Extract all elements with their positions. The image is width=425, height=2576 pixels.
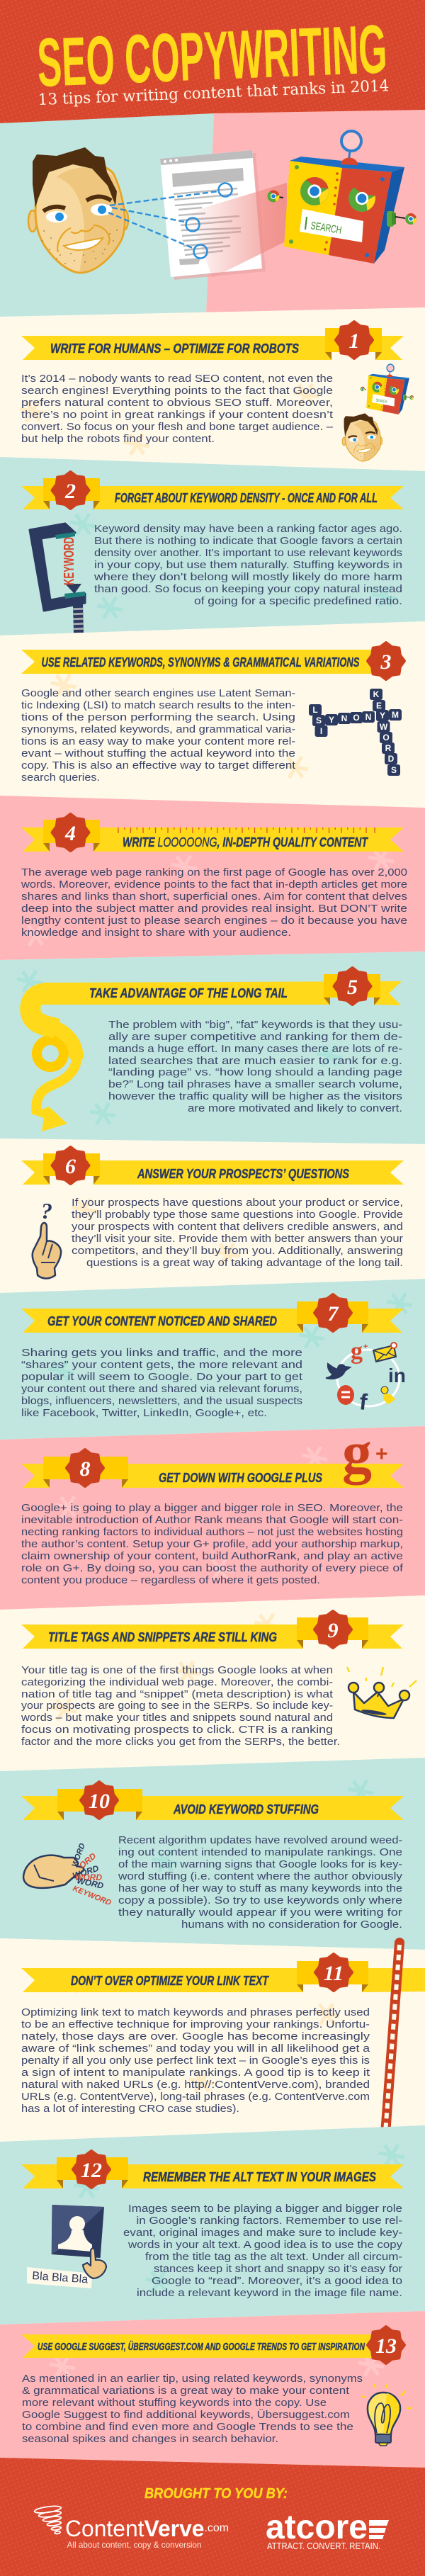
logo: ContentVerve: All about content, copy & conversion (67, 2540, 201, 2550)
icon: small face (342, 413, 382, 461)
text block 12: evant, original images and make sure to include key- (123, 2227, 402, 2239)
text block 13: more relevant without stuffing keywords into the copy. Use (22, 2397, 327, 2409)
icon: human face (28, 147, 128, 273)
text block 7: like Facebook, Twitter, LinkedIn, Google+, etc. (21, 1407, 267, 1419)
text block 4: words. Moreover, evidence points to the fact that in-depth articles get more (21, 879, 407, 891)
icon: google plus logo (342, 1420, 388, 1486)
icon: scrabble tiles: S (316, 716, 322, 725)
icon: scrabble tiles: I (320, 726, 322, 736)
icon: image card with alt text (27, 2205, 106, 2288)
panel: tip 6 (0, 1139, 425, 1293)
ribbon heading 4 with ruler: 4 (64, 822, 76, 845)
text block 6: they’ll visit your site. Provide them with better answers than your (72, 1233, 403, 1245)
text block 9: Your title tag is one of the first things Google looks at when (21, 1664, 333, 1676)
text block 2 (94, 523, 402, 607)
icon: social network ring: + (363, 1343, 368, 1351)
text block 10: copy a possible). So try to use keywords only where (118, 1894, 402, 1906)
icon: small robot (361, 364, 414, 414)
icon: small robot: SEARCH (375, 398, 387, 405)
icon: crown (347, 1667, 416, 1718)
icon: scrabble tiles: O (382, 733, 390, 742)
text block 11: URLs (e.g. ContentVerve), long-tail phrases (e.g. ContentVerve.com (21, 2091, 370, 2103)
text block 8: claim ownership of your content, build AuthorRank, and play an active (21, 1550, 403, 1562)
icon: social network ring (326, 1338, 406, 1415)
panel: tip 12 (0, 2125, 425, 2324)
text block 1: search engines! Everything points to the fact that Google (21, 385, 333, 397)
panel: tip 13 (0, 2311, 425, 2468)
ribbon heading 6: 6 (65, 1155, 76, 1178)
icon: scrabble tiles: N (366, 712, 371, 722)
icon: turkey stuffed with keywords: ORD (77, 1851, 98, 1870)
text block 8: Google+ is going to play a bigger and bigger role in SEO. Moreover, the (21, 1502, 403, 1514)
icon: scrabble tiles: R (385, 743, 392, 753)
icon: turkey stuffed with keywords: WORD (76, 1875, 105, 1891)
text block 12: Images seem to be playing a bigger and bigger role (128, 2203, 402, 2215)
text block 4: deep into the subject matter and provides real insight. But DON’T write (21, 903, 407, 915)
text block 4: lengthy content just to please search engines – do it because you have (21, 915, 407, 927)
text block 5: are more motivated and likely to convert. (188, 1102, 402, 1114)
text block 11: Optimizing link text to match keywords and phrases perfectly used (21, 2006, 370, 2018)
text block 12 (123, 2203, 403, 2299)
text block 11: natural with naked URLs (e.g. http//:ContentVerve.com), branded (21, 2079, 370, 2091)
text block 7 (21, 1347, 303, 1419)
icon: turkey stuffed with keywords: KEYWORD (72, 1885, 113, 1907)
ribbon heading 12: REMEMBER THE ALT TEXT IN YOUR IMAGES (143, 2170, 376, 2184)
text block 7: your content out there and shared via relevant forums, (21, 1383, 302, 1395)
text block 1 (21, 373, 334, 445)
text block 12: Google to “read”. Moreover, it’s a good idea to (152, 2275, 402, 2287)
icon: social network ring: g (351, 1338, 363, 1365)
icon: scrabble tiles: L (312, 705, 318, 715)
logo: ContentVerve: .com (205, 2522, 229, 2534)
text block 9: categorizing the individual web page. Moreover, the combi- (21, 1676, 333, 1688)
text block 6: competitors, and they’ll buy from you. Additionally, answering (72, 1245, 403, 1257)
text block 13: Google Suggest to find additional keywords, Übersuggest.com (22, 2408, 350, 2421)
icon: google plus logo: + (375, 1442, 388, 1466)
ribbon heading 9 (21, 1611, 404, 1649)
text block 7: Sharing gets you links and traffic, and the more (21, 1347, 302, 1359)
ribbon heading 3: 3 (380, 650, 391, 674)
ribbon heading 9: 9 (327, 1619, 339, 1642)
text block 10: word stuffing (i.e. content where the author obviously (118, 1870, 403, 1882)
icon: light bulb (361, 2384, 412, 2446)
icon: scrabble tiles: W (380, 722, 388, 732)
text block 13: As mentioned in an earlier tip, using related keywords, synonyms (22, 2373, 363, 2385)
ribbon heading 10: 10 (89, 1790, 110, 1813)
logo: ContentVerve (34, 2505, 229, 2550)
ribbon heading 7: GET YOUR CONTENT NOTICED AND SHARED (47, 1314, 277, 1328)
panel: tip 9 (0, 1595, 425, 1771)
text block 1: It’s 2014 – nobody wants to read SEO content, not even the (21, 373, 333, 385)
ribbon heading 5: 5 (347, 976, 358, 999)
panel: tip 1 (0, 307, 425, 471)
ribbon heading 7 (21, 1294, 404, 1333)
text block 9: nation of title tag and “snippet” (meta description) is what (21, 1688, 334, 1700)
ribbon heading 9: TITLE TAGS AND SNIPPETS ARE STILL KING (48, 1630, 277, 1644)
icon: hand with question mark: ? (41, 1198, 52, 1224)
text block 11: a sign of intent to manipulate rankings. A good tip is to keep it (21, 2067, 370, 2079)
text block 4: shares and links than short, superficial ones. Aim for content that delves (21, 891, 407, 903)
icon: clamp squeezing keyword (30, 524, 85, 633)
text block 5: ally are super competitive and ranking for them de- (108, 1031, 402, 1043)
ribbon heading 8: 8 (79, 1457, 91, 1481)
icon: scrabble tiles: D (388, 754, 395, 764)
subtitle: 13 tips for writing content that ranks in 2014 (38, 77, 390, 109)
ribbon heading 4 with ruler: WRITE LOOOOONG, IN-DEPTH QUALITY CONTENT (123, 835, 369, 849)
text block 8 (21, 1502, 404, 1586)
icon: chain (385, 1943, 400, 2134)
logo: atcore: ATTRACT. CONVERT. RETAIN. (267, 2541, 380, 2551)
ribbon heading 10 (21, 1782, 404, 1820)
panel: tip 7 (0, 1279, 425, 1440)
text block 1: prefers natural content to obvious SEO stuff. Moreover, (21, 397, 333, 409)
text block 1: convert. So focus on your flesh and bone target audience. – (21, 421, 334, 433)
icon: robot: SEARCH (310, 220, 342, 237)
ribbon heading 11 (21, 1954, 425, 1992)
text block 8: content you produce – regardless of where it gets posted. (21, 1574, 320, 1586)
text block 4: The average web page ranking on the first page of Google has over 2,000 (21, 866, 407, 879)
text block 6: they’ll probably type those same questions into Google. Provide (72, 1209, 403, 1221)
panel: tip 8 (0, 1420, 425, 1610)
ribbon heading 13: 13 (375, 2334, 397, 2358)
ribbon heading 6: ANSWER YOUR PROSPECTS’ QUESTIONS (137, 1167, 349, 1181)
icon: turkey stuffed with keywords: WORD (75, 1872, 102, 1882)
text block 2: of going for a specific predefined ratio. (194, 595, 402, 607)
icon: scrabble tiles: Y (329, 715, 334, 725)
text block 3 (21, 687, 296, 784)
ribbon heading 13 (21, 2327, 404, 2363)
ribbon heading 11: DON’T OVER OPTIMIZE YOUR LINK TEXT (71, 1974, 270, 1988)
icon: turkey stuffed with keywords: WORD (71, 1842, 87, 1868)
icon: scrabble tiles: M (392, 710, 399, 720)
text block 5: The problem with “big”, “fat” keywords is that they usu- (108, 1019, 402, 1031)
ribbon heading 8 (21, 1450, 404, 1488)
icon: scrabble tiles: S (391, 765, 397, 775)
logo: ContentVerve: ContentVerve (65, 2516, 205, 2541)
text block 8: necting ranking factors to individual authors – not just the websites hosting (21, 1526, 403, 1538)
icon: turkey stuffed with keywords: WORD (72, 1863, 100, 1881)
text block 9: your prospects are going to see in the SERPs. So include key- (21, 1700, 333, 1712)
icon: scrabble tiles: N (341, 713, 347, 723)
text block 2: But there is nothing to indicate that Google favors a certain (94, 535, 402, 547)
ribbon heading 5: TAKE ADVANTAGE OF THE LONG TAIL (89, 986, 288, 1000)
text block 13: & grammatical variations is a great way to make your content (22, 2385, 350, 2397)
text block 10: has gone of her way to stuff as many keywords into the (118, 1882, 402, 1894)
ribbon heading 1: WRITE FOR HUMANS – OPTIMIZE FOR ROBOTS (50, 341, 299, 356)
ribbon heading 2: 2 (64, 480, 76, 503)
icon: clamp squeezing keyword: KEYWORD (62, 537, 77, 585)
text block 6 (72, 1197, 403, 1269)
text block 5: lated searches that are much easier to rank for e.g. (108, 1055, 402, 1067)
text block 9: focus on motivating prospects to click. CTR is a ranking (21, 1724, 333, 1736)
text block 10: they naturally would appear if you were writing for (118, 1906, 402, 1919)
ribbon heading 3 (21, 643, 404, 679)
text block 9: factor and the more clicks you get from the SERPs, the better. (21, 1736, 340, 1748)
text block 6: If your prospects have questions about your product or service, (72, 1197, 403, 1209)
text block 5: mands a huge effort. In many cases there are lots of re- (108, 1043, 402, 1055)
text block 4: knowledge and insight to share with your audience. (21, 927, 291, 939)
footer heading: BROUGHT TO YOU BY: (144, 2486, 288, 2502)
text block 3: Google and other search engines use Latent Seman- (21, 687, 295, 699)
panel: header (0, 0, 425, 123)
icon: social network ring: f (358, 1389, 368, 1415)
icon: scrabble tiles: K (373, 689, 380, 699)
text block 5 (108, 1019, 402, 1114)
text block 7: popular it will seem to Google. Do your part to get (21, 1371, 303, 1383)
text block 10: Recent algorithm updates have revolved around weed- (118, 1834, 402, 1846)
text block 12: in Google’s ranking factors. Remember to use rel- (136, 2215, 402, 2227)
panel: tip 3 (0, 621, 425, 808)
text block 2: in your copy, but use them naturally. Stuffing keywords in (94, 559, 402, 571)
text block 8: inevitable introduction of Author Rank means that Google will start con- (21, 1514, 403, 1526)
ribbon heading 11: 11 (324, 1962, 344, 1985)
text block 3: tions is an easy way to make your content more rel- (21, 735, 295, 747)
text block 11: nately, those days are over. Google has become increasingly (21, 2030, 370, 2043)
text block 11: has a lot of interesting CRO case studies). (21, 2103, 239, 2115)
text block 10 (118, 1834, 403, 1931)
ribbon heading 7: 7 (327, 1302, 339, 1326)
ribbon heading 12 (21, 2151, 404, 2188)
text block 4 (21, 866, 407, 939)
panel: hero illustration (0, 110, 425, 317)
text block 2: than good. So focus on keeping your copy natural instead (94, 583, 402, 595)
dashed eye lines and keyword circles (108, 183, 232, 258)
icon: image card with alt text: Bla Bla Bla (32, 2270, 89, 2286)
text block 12: stances keep it short and snappy so it’s easy for (154, 2263, 402, 2275)
ribbon heading 5 (42, 968, 402, 1005)
text block 3: tic Indexing (LSI) to match search results to the inten- (21, 699, 295, 711)
panel: tip 10 (0, 1758, 425, 1950)
text block 11: to be an effective technique for improving your rankings. Unfortu- (21, 2018, 370, 2030)
icon: scrabble tiles: Y (380, 711, 385, 721)
text block 6: questions is a great way of taking advantage of the long tail. (86, 1257, 403, 1269)
panel: tip 5 (0, 951, 425, 1144)
ribbon heading 8: GET DOWN WITH GOOGLE PLUS (159, 1471, 322, 1485)
panel: footer (0, 2458, 425, 2576)
text block 3: evant – without stuffing the actual keyword into the (21, 747, 295, 759)
text block 7: “shares” your content gets, the more relevant and (21, 1359, 302, 1371)
icon: robot (268, 131, 416, 264)
text block 5: however the traffic quality will be higher as the visitors (108, 1090, 402, 1102)
text block 13 (22, 2373, 363, 2445)
icon: hand with question mark (33, 1198, 61, 1278)
text block 12: words in your alt text. A good idea is to use the copy (128, 2239, 403, 2251)
text block 1: there’s no point in great rankings if your content doesn’t (21, 409, 334, 421)
text block 11: aware of “link schemes” and today you will in all likelihood get a (21, 2043, 370, 2055)
ribbon heading 1 (21, 322, 404, 360)
text block 12: include a relevant keyword in the image file name. (137, 2287, 402, 2299)
icon: google plus logo: g (342, 1420, 372, 1486)
ribbon heading 1: 1 (348, 329, 360, 353)
icon: scrabble tiles (309, 689, 402, 776)
logo: atcore: atcore (266, 2509, 368, 2546)
text block 9: words – but make your titles and snippets sound natural and (21, 1712, 333, 1724)
text block 2: where they don’t belong will mostly likely do more harm (94, 571, 402, 583)
text block 3: copy. This is also an effective way to target different (21, 759, 296, 772)
text block 3: synonyms, related keywords, and grammatical varia- (21, 723, 295, 735)
text block 3: tions of the person performing the search. Using (21, 711, 295, 723)
ribbon heading 4 with ruler (21, 814, 404, 852)
icon: scrabble tiles: E (376, 701, 382, 711)
text block 3: search queries. (21, 772, 100, 784)
text block 8: role on G+. By doing so, you can boost the authority of every piece of (21, 1562, 404, 1574)
text block 2: density over another. It’s important to use relevant keywords (94, 547, 402, 559)
text block 6: your prospects with content that delivers credible answers, and (72, 1221, 403, 1233)
ribbon heading 6 (21, 1147, 404, 1185)
icon: turkey stuffed with keywords (23, 1842, 113, 1907)
text block 5: “landing page” vs. “how long should a landing page (108, 1066, 402, 1078)
text block 7: blogs, influencers, newsletters, and the usual suspects (21, 1395, 302, 1407)
text block 9 (21, 1664, 340, 1748)
panel: tip 2 (0, 457, 425, 635)
text block 10: of the main warning signs that Google looks for is key- (118, 1858, 402, 1870)
text block 5: be?” Long tail phrases have a smaller search volume, (108, 1078, 402, 1090)
text block 13: seasonal spikes and changes in search behavior. (22, 2433, 278, 2445)
text block 11 (21, 2006, 370, 2115)
ribbon heading 2 (21, 472, 404, 509)
text block 1: but help the robots find your content. (21, 433, 215, 445)
icon: scrabble tiles: O (353, 713, 360, 723)
text block 13: to combine and find even more and Google Trends to see the (22, 2421, 353, 2433)
text block 8: the author’s content. Setup your G+ profile, add your authorship markup, (21, 1538, 403, 1550)
ribbon heading 10: AVOID KEYWORD STUFFING (173, 1802, 319, 1817)
text block 2: Keyword density may have been a ranking factor ages ago. (94, 523, 402, 535)
long tail arrow ribbon (30, 993, 142, 1131)
icon: web page (160, 150, 287, 280)
text block 11: penalty if all you only use perfect link text – in Google’s eyes this is (21, 2055, 370, 2067)
panel: tip 11 (0, 1938, 425, 2142)
text block 12: from the title tag as the alt text. Under all circum- (145, 2251, 402, 2263)
text block 10: humans with no consideration for Google. (181, 1919, 402, 1931)
panel: tip 4 (0, 796, 425, 960)
icon: social network ring: in (388, 1365, 406, 1386)
ribbon heading 12: 12 (81, 2159, 102, 2182)
text block 10: ing out content intended to manipulate rankings. One (118, 1846, 402, 1858)
